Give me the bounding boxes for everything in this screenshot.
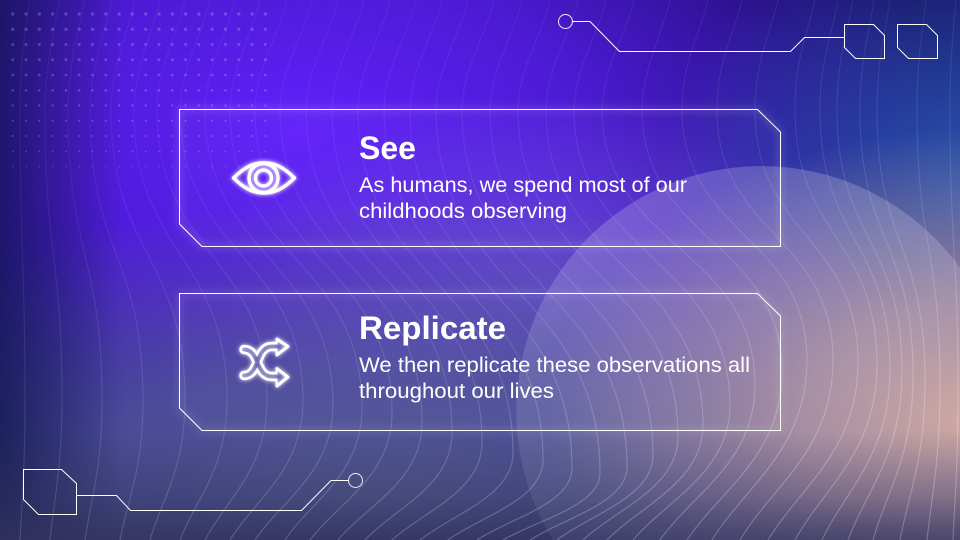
text: replicate description: We then replicate these observations all [359, 354, 750, 377]
text: see description: As humans, we spend most of our [359, 174, 687, 197]
text: see description [359, 174, 687, 223]
text: replicate description [359, 354, 750, 403]
text: replicate description: throughout our lives [359, 380, 554, 403]
text: see description: childhoods observing [359, 200, 567, 223]
icon: shuffle arrows [236, 334, 292, 390]
panel: replicate [180, 294, 780, 430]
large translucent circle [516, 166, 960, 540]
heading: see: See [359, 130, 416, 166]
circuit decoration: top right [558, 14, 938, 58]
panel: see [180, 110, 780, 246]
circuit decoration: bottom left [24, 470, 362, 514]
dot grid [13, 14, 268, 166]
icon: eye [234, 163, 294, 193]
heading: replicate: Replicate [359, 310, 506, 346]
